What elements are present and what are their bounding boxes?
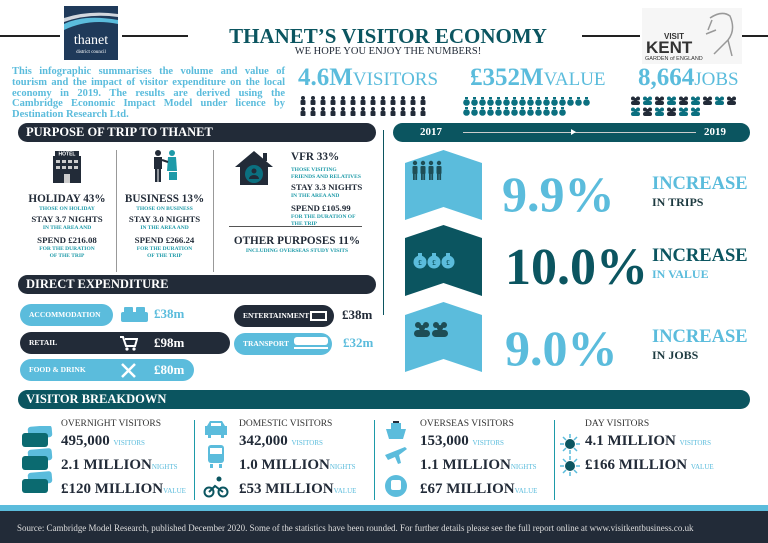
label: increase in trips — [652, 174, 748, 209]
panel: VFR text: THE TRIP — [291, 221, 317, 227]
label: increase in trips: INCREASE — [652, 174, 748, 194]
footer: Source: Cambridge Model Research, published December 2020. Some of the statistics have been rounded. For further details please see the full report online at www.visitkentbusiness.co.uk — [17, 523, 694, 533]
panel: holiday: SPEND £216.08 — [37, 235, 97, 245]
panel: business: SPEND £266.24 — [135, 235, 194, 245]
value: transport: £32m — [343, 335, 373, 350]
panel: overseas visitors: 153,000 VISITORS — [420, 433, 504, 449]
panel: VFR text: FOR THE DURATION OF — [291, 214, 355, 220]
chevron: trips — [405, 150, 482, 372]
timeline bar 2017-2019: 2019 — [704, 126, 726, 138]
heading: direct expenditure: DIRECT EXPENDITURE — [26, 277, 169, 291]
icons: car train bike — [204, 421, 228, 498]
stat: 10.0% value: 10.0% — [505, 239, 648, 296]
pill: accommodation — [20, 304, 113, 326]
logo: visit kent: GARDEN of ENGLAND — [645, 56, 703, 62]
label: increase in jobs: IN JOBS — [652, 348, 698, 362]
panel: VFR text: IN THE AREA AND — [291, 193, 339, 199]
pill: retail with cart and value — [20, 332, 230, 354]
panel: holiday: THOSE ON HOLIDAY — [39, 206, 95, 212]
icon: money bags — [463, 97, 590, 116]
logo: thanet district council: thanet — [74, 33, 108, 48]
logo: visit kent: KENT — [646, 38, 692, 57]
decorative header lines — [0, 35, 60, 37]
pill: transport: TRANSPORT — [243, 339, 289, 348]
heading: purpose of trip — [18, 123, 376, 142]
pill: food & drink — [20, 359, 194, 381]
dividers — [116, 150, 117, 272]
title: THANET’S VISITOR ECONOMY — [229, 24, 547, 48]
dividers — [194, 420, 195, 500]
pill: entertainment — [234, 305, 334, 327]
logo: thanet district council — [64, 6, 118, 60]
heading: visitor breakdown — [18, 390, 750, 409]
panel: domestic visitors: DOMESTIC VISITORS — [239, 419, 332, 429]
heading: purpose of trip: PURPOSE OF TRIP TO THANET — [26, 125, 213, 139]
panel: holiday: HOLIDAY 43% — [28, 193, 106, 205]
chevron: trips: £ — [446, 259, 450, 267]
panel: VFR text: STAY 3.3 NIGHTS — [291, 182, 362, 192]
chevron: trips: £ — [418, 259, 422, 267]
pill: accommodation: ACCOMMODATION — [29, 310, 101, 319]
panel: business — [125, 150, 204, 259]
logo: thanet district council: district council — [76, 50, 106, 55]
label: increase in value: INCREASE — [652, 246, 748, 266]
panel: holiday — [28, 151, 106, 259]
pill: retail with cart and value: RETAIL — [29, 338, 57, 347]
stat: value: £352MVALUE — [470, 64, 606, 91]
panel: holiday: STAY 3.7 NIGHTS — [31, 214, 103, 224]
label: increase in value — [652, 246, 748, 281]
value: entertainment: £38m — [342, 307, 372, 322]
panel: domestic visitors: £53 MILLIONVALUE — [239, 481, 356, 497]
panel: overnight visitors — [61, 419, 186, 497]
icon: handshake — [154, 150, 177, 182]
panel: VFR text — [291, 151, 362, 227]
panel: business: BUSINESS 13% — [125, 193, 204, 205]
panel: business: FOR THE DURATION — [137, 246, 192, 252]
label: increase in value: IN VALUE — [652, 267, 709, 281]
icons: suns — [560, 434, 580, 476]
panel: domestic visitors: 342,000 VISITORS — [239, 433, 323, 449]
panel: VFR text: THOSE VISITING — [291, 167, 337, 173]
panel: other purposes — [234, 235, 360, 254]
logo: visit kent: VISIT — [664, 32, 684, 41]
icon: house VFR — [235, 151, 273, 185]
panel: overnight visitors: OVERNIGHT VISITORS — [61, 419, 161, 429]
icons: ship plane train — [385, 421, 407, 497]
subtitle: WE HOPE YOU ENJOY THE NUMBERS! — [295, 46, 481, 57]
panel: day visitors: 4.1 MILLION VISITORS — [585, 433, 711, 449]
timeline bar 2017-2019 — [393, 123, 750, 142]
timeline bar 2017-2019: 2017 — [420, 126, 442, 138]
heading: visitor breakdown: VISITOR BREAKDOWN — [26, 392, 166, 406]
pill: transport — [234, 333, 332, 355]
panel: other purposes: OTHER PURPOSES 11% — [234, 235, 360, 247]
icon: groups — [631, 96, 736, 116]
panel: business: OF THE TRIP — [147, 253, 182, 259]
panel: day visitors — [585, 419, 714, 473]
pill: entertainment: ENTERTAINMENT — [243, 311, 309, 320]
label: increase in jobs — [652, 327, 748, 362]
panel: holiday: IN THE AREA AND — [43, 225, 91, 231]
label: increase in trips: IN TRIPS — [652, 195, 703, 209]
panel: overnight visitors: 495,000 VISITORS — [61, 433, 145, 449]
panel: holiday: FOR THE DURATION — [39, 246, 95, 252]
panel: overseas visitors — [420, 419, 538, 497]
decorative vertical line — [383, 130, 384, 315]
heading: direct expenditure — [18, 275, 376, 294]
panel: domestic visitors: 1.0 MILLIONNIGHTS — [239, 457, 356, 473]
panel: overnight visitors: £120 MILLIONVALUE — [61, 481, 186, 497]
pill: retail with cart and value: £98m — [154, 335, 184, 350]
stat: visitors: 4.6MVISITORS — [298, 64, 438, 91]
stat: 9.0% jobs: 9.0% — [505, 320, 618, 376]
panel: other purposes: INCLUDING OVERSEAS STUDY VISITS — [246, 248, 348, 254]
pill: food & drink: FOOD & DRINK — [29, 365, 86, 374]
intro text: This infographic summarises the volume and value of tourism and the impact of visitor expenditure on the local economy in 2019. The results are derived using the Cambridge Economic Impact Model under licence by Destination Research Ltd. — [12, 66, 285, 120]
footer — [0, 505, 768, 543]
panel: overseas visitors: £67 MILLIONVALUE — [420, 481, 537, 497]
stat: 9.9% trips: 9.9% — [502, 166, 614, 222]
panel: day visitors: £166 MILLION VALUE — [585, 457, 714, 473]
panel: day visitors: DAY VISITORS — [585, 419, 649, 429]
icon: people rows — [300, 96, 426, 116]
panel: domestic visitors — [239, 419, 356, 497]
panel: VFR text: SPEND £105.99 — [291, 203, 351, 213]
icon: bed — [121, 307, 148, 322]
panel: overseas visitors: 1.1 MILLIONNIGHTS — [420, 457, 537, 473]
icon: hotel: HOTEL — [59, 152, 75, 158]
label: increase in jobs: INCREASE — [652, 327, 748, 347]
stat: jobs: 8,664JOBS — [638, 64, 739, 91]
icon: pillows — [22, 426, 52, 493]
panel: VFR text: VFR 33% — [291, 151, 339, 163]
panel: VFR text: FRIENDS AND RELATIVES — [291, 174, 361, 180]
panel: business: THOSE ON BUSINESS — [136, 206, 193, 212]
panel: overnight visitors: 2.1 MILLIONNIGHTS — [61, 457, 178, 473]
pill: food & drink: £80m — [154, 362, 184, 377]
chevron: trips: £ — [432, 259, 436, 267]
panel: holiday: OF THE TRIP — [50, 253, 84, 259]
panel: overseas visitors: OVERSEAS VISITORS — [420, 419, 514, 429]
logo: visit kent — [642, 8, 742, 64]
panel: business: STAY 3.0 NIGHTS — [129, 214, 200, 224]
value: accommodation: £38m — [154, 306, 184, 321]
panel: business: IN THE AREA AND — [140, 225, 189, 231]
icon: hotel — [53, 151, 81, 183]
